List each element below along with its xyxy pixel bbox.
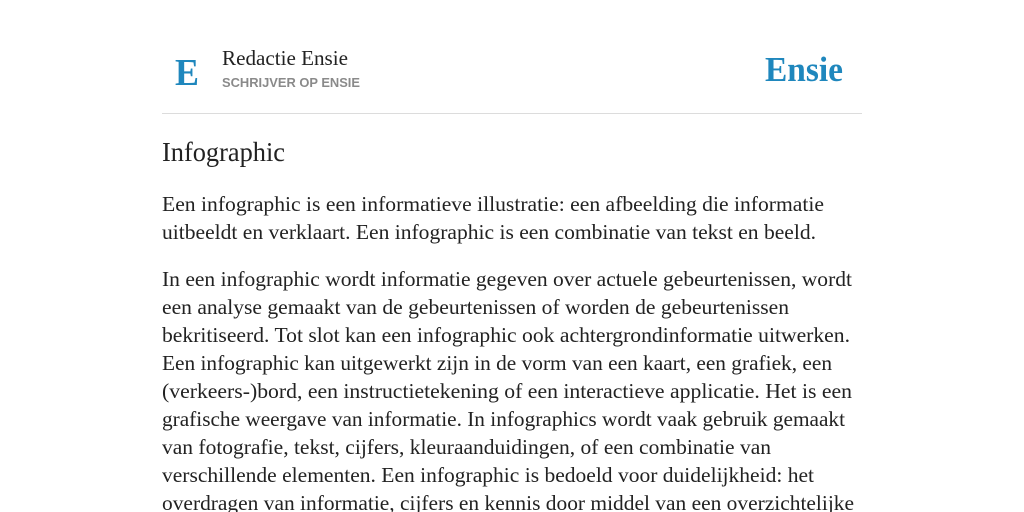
icon: E avatar: E xyxy=(175,52,199,94)
logo: Ensie: Ensie xyxy=(765,50,843,89)
header xyxy=(175,46,843,94)
text block: second paragraph: van fotografie, tekst, cijfers, kleuraanduidingen, of een combinatie van xyxy=(162,435,772,459)
text block: second paragraph: een analyse gemaakt van de gebeurtenissen of worden de gebeurtenissen xyxy=(162,295,790,319)
text block: second paragraph: (verkeers-)bord, een instructietekening of een interactieve applicatie. Het is een xyxy=(162,379,853,403)
text block: second paragraph xyxy=(162,267,854,512)
text block: second paragraph: Een infographic kan uitgewerkt zijn in de vorm van een kaart, een grafiek, een xyxy=(162,351,832,375)
heading: Infographic xyxy=(162,137,285,167)
author role: SCHRIJVER OP ENSIE xyxy=(222,75,360,90)
text block: second paragraph: grafische weergave van informatie. In infographics wordt vaak gebruik gemaakt xyxy=(162,407,845,431)
text block: intro paragraph: Een infographic is een informatieve illustratie: een afbeelding die informatie xyxy=(162,192,824,216)
text block: second paragraph: In een infographic wordt informatie gegeven over actuele gebeurtenissen, wordt xyxy=(162,267,852,291)
text block: second paragraph: bekritiseerd. Tot slot kan een infographic ook achtergrondinformatie uitwerken. xyxy=(162,323,850,347)
text block: intro paragraph xyxy=(162,192,824,244)
text block: intro paragraph: uitbeeldt en verklaart. Een infographic is een combinatie van tekst en beeld. xyxy=(162,220,816,244)
text block: second paragraph: verschillende elementen. Een infographic is bedoeld voor duidelijkheid: het xyxy=(162,463,814,487)
author name: Redactie Ensie xyxy=(222,46,348,70)
